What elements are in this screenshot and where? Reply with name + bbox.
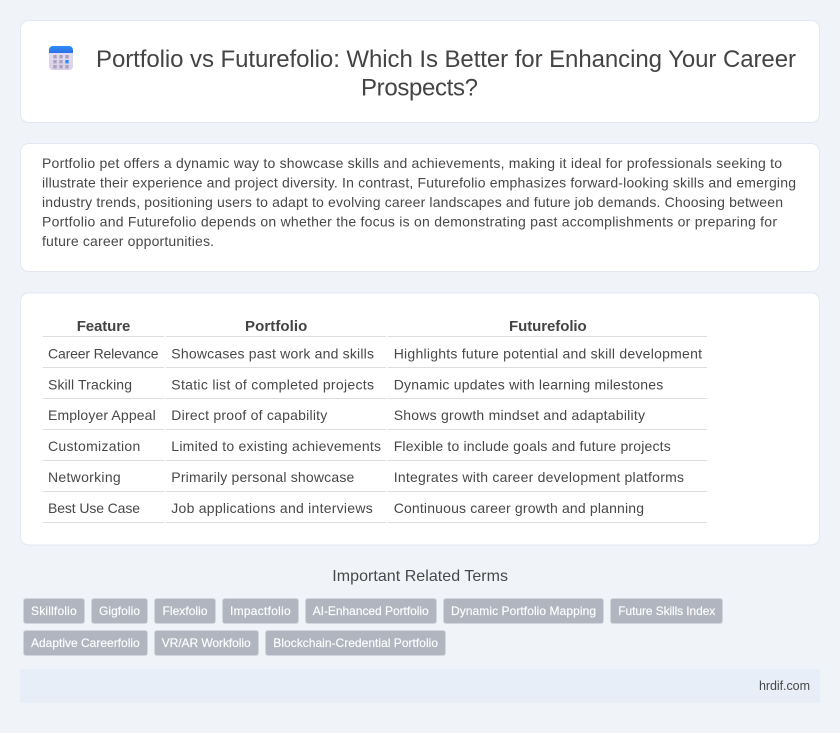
text block: intro paragraph	[42, 155, 796, 249]
title: Portfolio vs Futurefolio: Which Is Better for Enhancing Your Career	[96, 46, 796, 73]
table row: Networking: Networking	[48, 469, 121, 485]
heading: important related terms: Important Related Terms	[332, 568, 508, 585]
tag list: related terms: VR/AR Workfolio	[162, 636, 251, 650]
table row: Best Use Case: Best Use Case	[48, 500, 140, 516]
table row: Skill Tracking: Static list of completed projects	[171, 376, 374, 392]
footer source text: hrdif.com	[759, 679, 810, 693]
table row: Employer Appeal: Employer Appeal	[48, 407, 156, 423]
table row: Employer Appeal	[43, 407, 707, 430]
table header row: Portfolio	[245, 318, 307, 335]
table row: Skill Tracking	[43, 376, 707, 399]
icon: calendar	[49, 46, 73, 70]
table row: Best Use Case: Continuous career growth and planning	[394, 500, 644, 516]
table row: Employer Appeal: Direct proof of capability	[171, 407, 327, 423]
table row: Career Relevance: Showcases past work and skills	[171, 345, 374, 361]
panel: intro paragraph card	[20, 144, 820, 272]
tag list: related terms: AI-Enhanced Portfolio	[313, 604, 429, 618]
text block: intro paragraph: industry trends, positioning users to adapt to evolving career landscapes and future job demands. Choosing between	[42, 194, 783, 210]
tag list: related terms: Gigfolio	[99, 604, 140, 618]
tag list: related terms: Flexfolio	[162, 604, 208, 618]
table row: Career Relevance	[43, 345, 707, 368]
table row: Career Relevance: Career Relevance	[48, 345, 159, 361]
table row: Networking	[43, 469, 707, 492]
tag list: related terms: Adaptive Careerfolio	[31, 636, 140, 650]
tag list: related terms: Blockchain-Credential Portfolio	[273, 636, 438, 650]
title: Prospects?	[361, 74, 478, 102]
table row: Customization: Customization	[48, 438, 140, 454]
table row: Employer Appeal: Shows growth mindset and adaptability	[394, 407, 645, 423]
table row: Customization: Flexible to include goals and future projects	[394, 438, 671, 454]
panel: comparison table card	[20, 293, 820, 545]
text block: intro paragraph: Portfolio and Futurefolio depends on whether the focus is on demonstrating past accomplishments or preparing for	[42, 214, 777, 230]
tag list: related terms: Impactfolio	[230, 604, 291, 618]
tag list: related terms: Future Skills Index	[618, 604, 715, 618]
text block: intro paragraph: Portfolio pet offers a dynamic way to showcase skills and achievements, making it ideal for professionals seeking to	[42, 155, 782, 171]
table row: Best Use Case	[43, 500, 707, 523]
table row: Networking: Primarily personal showcase	[171, 469, 355, 485]
table header row: Feature	[77, 318, 130, 335]
table row: Skill Tracking: Skill Tracking	[48, 376, 132, 392]
title	[96, 46, 796, 102]
table header row	[43, 318, 707, 337]
table row: Skill Tracking: Dynamic updates with learning milestones	[394, 376, 663, 392]
table header row: Futurefolio	[509, 318, 587, 335]
tag list: related terms: Skillfolio	[31, 604, 77, 618]
table row: Customization	[43, 438, 707, 461]
panel: title card	[20, 20, 820, 122]
table row: Career Relevance: Highlights future potential and skill development	[394, 345, 702, 361]
table row: Best Use Case: Job applications and interviews	[171, 500, 373, 516]
tag list: related terms	[24, 598, 722, 656]
tag list: related terms: Dynamic Portfolio Mapping	[451, 604, 596, 618]
text block: intro paragraph: future career opportunities.	[42, 233, 214, 249]
table row: Customization: Limited to existing achievements	[171, 438, 381, 454]
footer bar	[20, 669, 820, 703]
table row: Networking: Integrates with career development platforms	[394, 469, 684, 485]
text block: intro paragraph: illustrate their experience and project diversity. In contrast, Futurefolio emphasizes forward-looking skills and emerging	[42, 174, 796, 190]
